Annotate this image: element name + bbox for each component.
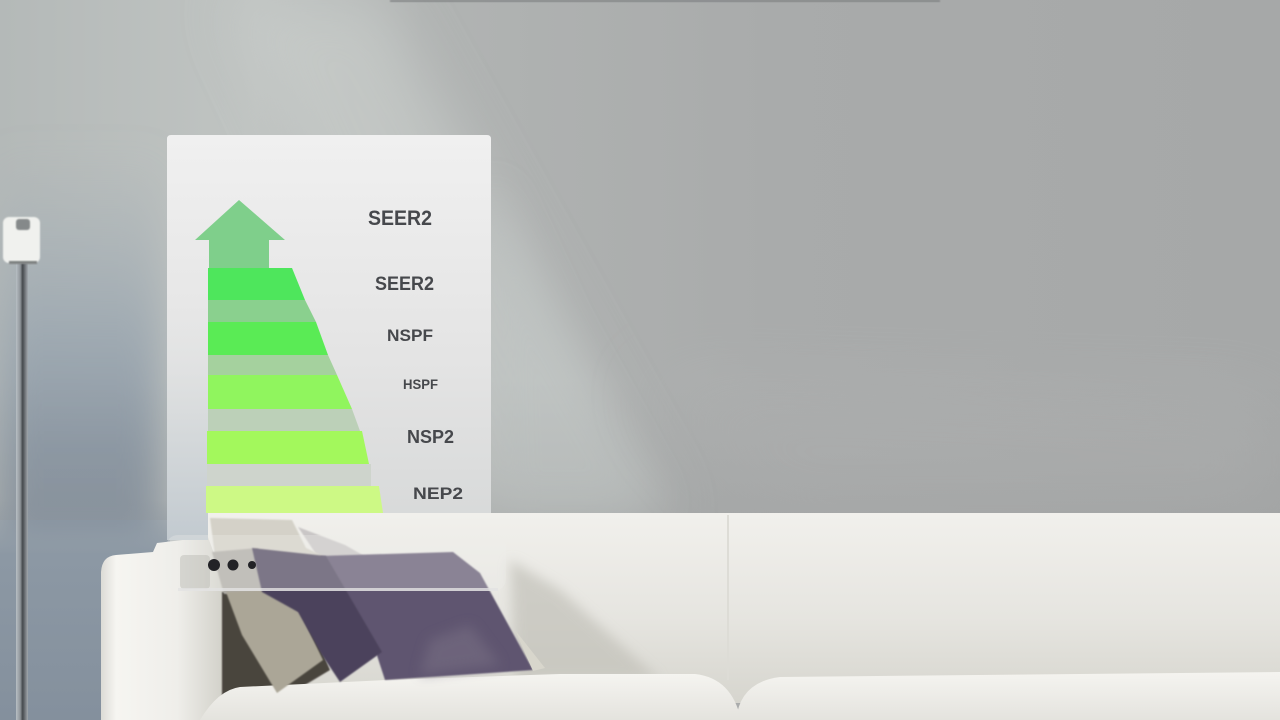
footer icons: [208, 559, 256, 571]
panel: efficiency scale: [167, 135, 491, 540]
pillow: dark purple: [252, 548, 382, 682]
stepped bar chart: [206, 268, 383, 513]
label 3: NSPF: [387, 326, 433, 345]
sofa: [101, 513, 1280, 720]
panel: translucent footer bar: [166, 535, 506, 591]
pillow: crumpled grey: [212, 548, 275, 594]
pillow: beige: [226, 590, 323, 693]
label 6: NEP2: [413, 484, 463, 503]
label 2: SEER2: [375, 274, 434, 295]
sofa arm: [101, 537, 228, 720]
icon: upward arrow: [195, 200, 285, 268]
seat cushion right: [736, 672, 1280, 720]
label 1: SEER2: [368, 207, 432, 230]
sofa back: [208, 513, 1280, 703]
floor lamp: [3, 217, 40, 720]
lamp head: [3, 217, 40, 264]
label 4: HSPF: [403, 376, 438, 392]
seat cushion left: [200, 674, 741, 720]
pillows: [210, 518, 545, 693]
pillow: purple: [320, 552, 533, 680]
pillow: cream top: [210, 518, 332, 560]
pillow: pale back corner: [298, 527, 375, 562]
shadow behind pillows: [222, 592, 330, 700]
label 5: NSP2: [407, 427, 454, 447]
